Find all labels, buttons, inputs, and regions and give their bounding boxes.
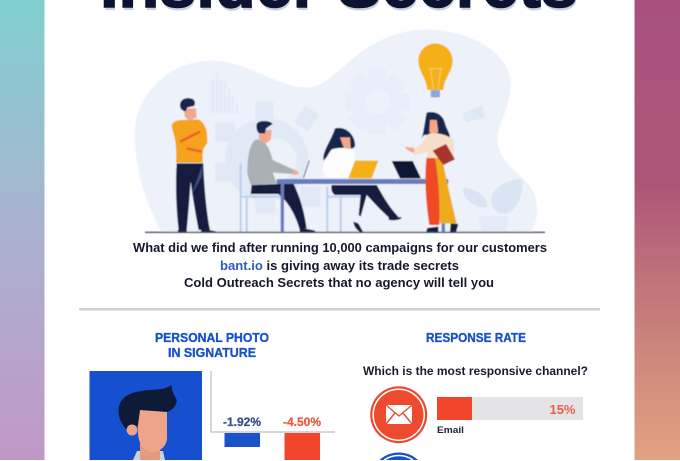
- intro text: bant.io is giving away its trade secrets: [220, 259, 459, 273]
- large gear: [215, 102, 320, 213]
- ground line: [145, 232, 545, 233]
- bar: email 15%: [437, 397, 583, 435]
- heading: personal photo: IN SIGNATURE: [168, 346, 256, 360]
- table: [277, 179, 448, 232]
- bar: -1.92%: -1.92%: [223, 415, 261, 429]
- icon: email: [370, 386, 427, 443]
- bar: -4.50%: [283, 415, 321, 460]
- illustration: team at table: [135, 30, 545, 233]
- icon: envelope: [463, 105, 485, 123]
- yellow laptop: [348, 161, 378, 178]
- intro text: Cold Outreach Secrets that no agency will tell you: [184, 276, 494, 290]
- plant: [463, 179, 523, 231]
- chair right: [327, 187, 362, 232]
- panel: response rate: [363, 331, 588, 460]
- left gradient panel: [0, 0, 44, 460]
- person: seated man: [247, 121, 315, 232]
- intro text: What did we find after running 10,000 campaigns for our customers: [133, 241, 547, 255]
- portrait: [90, 371, 202, 460]
- chair left: [241, 163, 282, 232]
- person: standing man: [172, 98, 216, 232]
- icon: light bulb: [418, 43, 453, 97]
- heading: personal photo: PERSONAL PHOTO: [155, 331, 269, 345]
- bar: email 15%: Email: [437, 425, 464, 435]
- heading: response rate: RESPONSE RATE: [426, 331, 526, 345]
- intro text: [133, 241, 547, 290]
- icon: second channel: [379, 452, 418, 460]
- bar: -1.92%: [223, 415, 261, 447]
- person: standing woman: [405, 112, 458, 232]
- right gradient panel: [634, 0, 680, 460]
- person: seated woman: [323, 128, 402, 232]
- bar: -4.50%: -4.50%: [283, 415, 321, 429]
- background blob: [135, 30, 537, 232]
- black laptop: [392, 161, 421, 178]
- large gear hole: [253, 138, 297, 182]
- chart axes: [211, 371, 335, 432]
- panel: personal photo in signature: [90, 331, 335, 460]
- faint bar chart: [213, 73, 237, 113]
- heading: personal photo: [155, 331, 269, 360]
- question: Which is the most responsive channel?: [363, 366, 588, 378]
- bar: email 15%: 15%: [549, 402, 576, 417]
- small gear: [345, 69, 410, 134]
